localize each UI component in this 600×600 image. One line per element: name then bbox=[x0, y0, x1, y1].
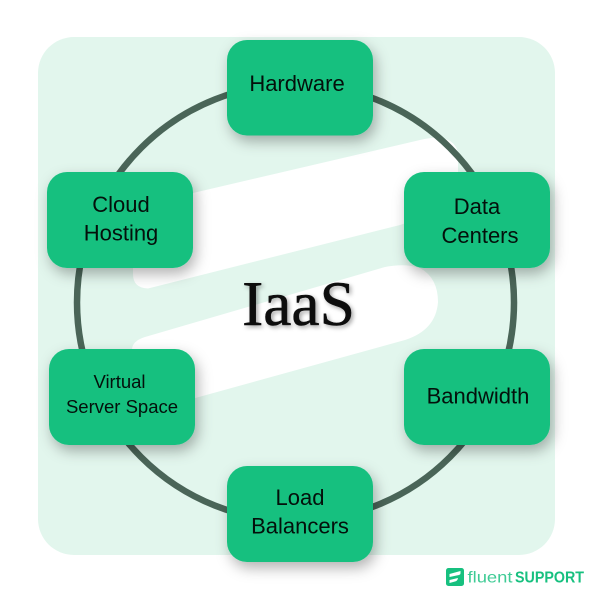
node: Bandwidth: Bandwidth bbox=[427, 384, 529, 408]
node: Cloud Hosting bbox=[47, 172, 193, 268]
watermark: white logo stripes bbox=[132, 138, 458, 405]
node: Cloud Hosting: Hosting bbox=[84, 220, 158, 246]
title: IaaS: IaaS bbox=[242, 268, 355, 339]
node: Load Balancers bbox=[227, 466, 373, 562]
node: Cloud Hosting: Cloud bbox=[92, 192, 150, 217]
ring connector bbox=[77, 84, 514, 521]
node: Virtual Server Space: Server Space bbox=[66, 396, 178, 417]
node: Virtual Server Space: Virtual bbox=[93, 371, 146, 392]
node: Hardware bbox=[227, 40, 373, 136]
node: Virtual Server Space bbox=[49, 349, 195, 445]
node: Data Centers: Data bbox=[454, 194, 501, 219]
logo: fluent SUPPORT: fluent bbox=[468, 570, 513, 586]
panel: background bbox=[38, 37, 555, 555]
icon: fluent logo mark bbox=[446, 568, 464, 586]
node: Data Centers: Centers bbox=[441, 223, 519, 248]
node: Bandwidth bbox=[404, 349, 550, 445]
node: Data Centers bbox=[404, 172, 550, 268]
node: Hardware: Hardware bbox=[249, 71, 345, 96]
node: Load Balancers: Load bbox=[276, 485, 324, 510]
logo: fluent SUPPORT: SUPPORT bbox=[515, 570, 584, 586]
logo: fluent SUPPORT bbox=[446, 568, 584, 586]
node: Load Balancers: Balancers bbox=[251, 514, 349, 538]
